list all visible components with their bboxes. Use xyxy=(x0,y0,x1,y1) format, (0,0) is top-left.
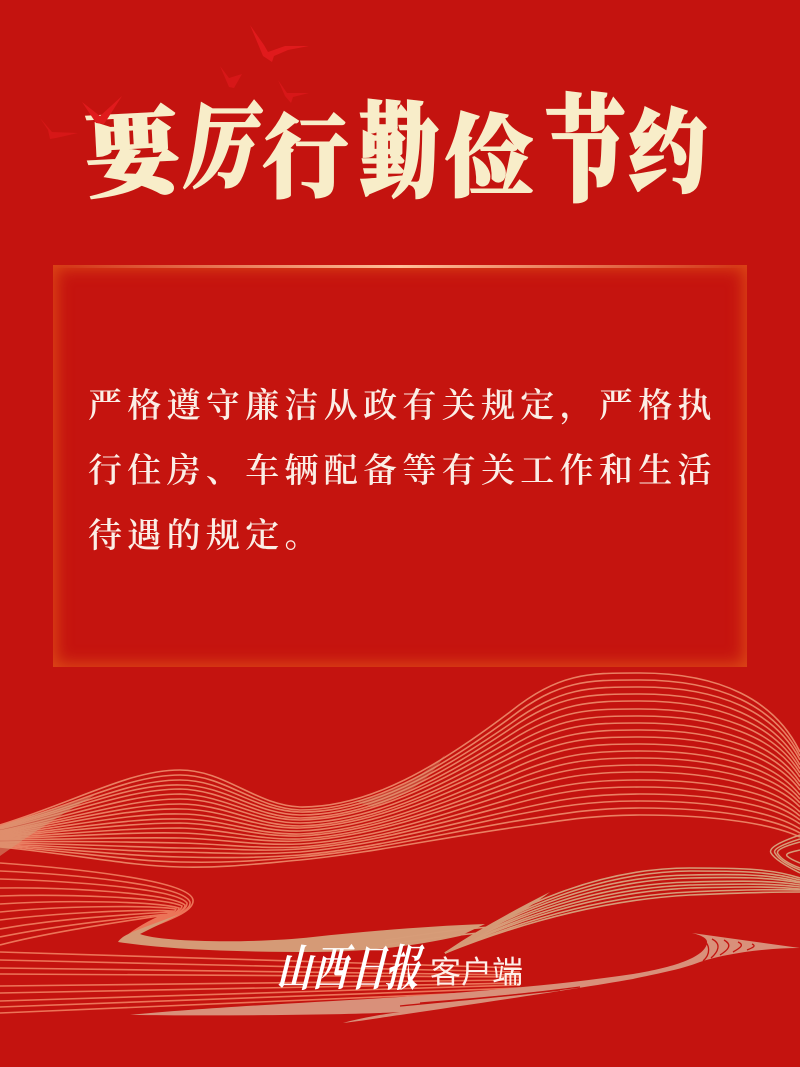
text block: 待遇的规定。 xyxy=(88,518,324,555)
icon: bird behind title xyxy=(82,96,122,124)
text block xyxy=(88,388,717,555)
right rising ribbon xyxy=(445,868,800,953)
panel: text frame xyxy=(53,265,747,667)
title: 节 xyxy=(545,92,625,216)
title: 约 xyxy=(628,103,706,203)
title: 俭 xyxy=(445,110,533,209)
text block: 行住房、车辆配备等有关工作和生活 xyxy=(88,453,717,490)
icon: faint bird far left xyxy=(40,118,78,139)
icon: large bird xyxy=(250,25,309,62)
right edge curl xyxy=(771,835,800,873)
left fold ribbon xyxy=(0,863,193,945)
birds xyxy=(41,26,308,139)
logo: 报 xyxy=(381,943,429,997)
title: 勤 xyxy=(359,98,439,210)
logo xyxy=(273,943,523,997)
icon: small bird left xyxy=(220,66,242,88)
title: 厉 xyxy=(181,100,265,200)
tan bunching near valley xyxy=(355,755,445,807)
strip lines to the right xyxy=(385,927,490,945)
top wave ribbon xyxy=(0,673,800,867)
bottom swoosh xyxy=(130,933,800,1023)
title: 要 xyxy=(82,100,183,210)
tan bunching near crest xyxy=(0,795,95,856)
icon: small bird right xyxy=(278,80,309,103)
right rising ribbon base xyxy=(445,892,550,953)
text block: 严格遵守廉洁从政有关规定，严格执 xyxy=(88,388,717,425)
logo: 日 xyxy=(347,943,395,997)
title: 行 xyxy=(263,109,349,209)
logo: 山 xyxy=(273,943,321,997)
middle tapered strip xyxy=(118,914,485,952)
logo: 西 xyxy=(309,943,357,997)
logo: 客户端 xyxy=(430,955,523,990)
swoosh curl lines xyxy=(400,938,754,1006)
lower left lines xyxy=(0,952,520,1013)
title xyxy=(82,90,707,216)
